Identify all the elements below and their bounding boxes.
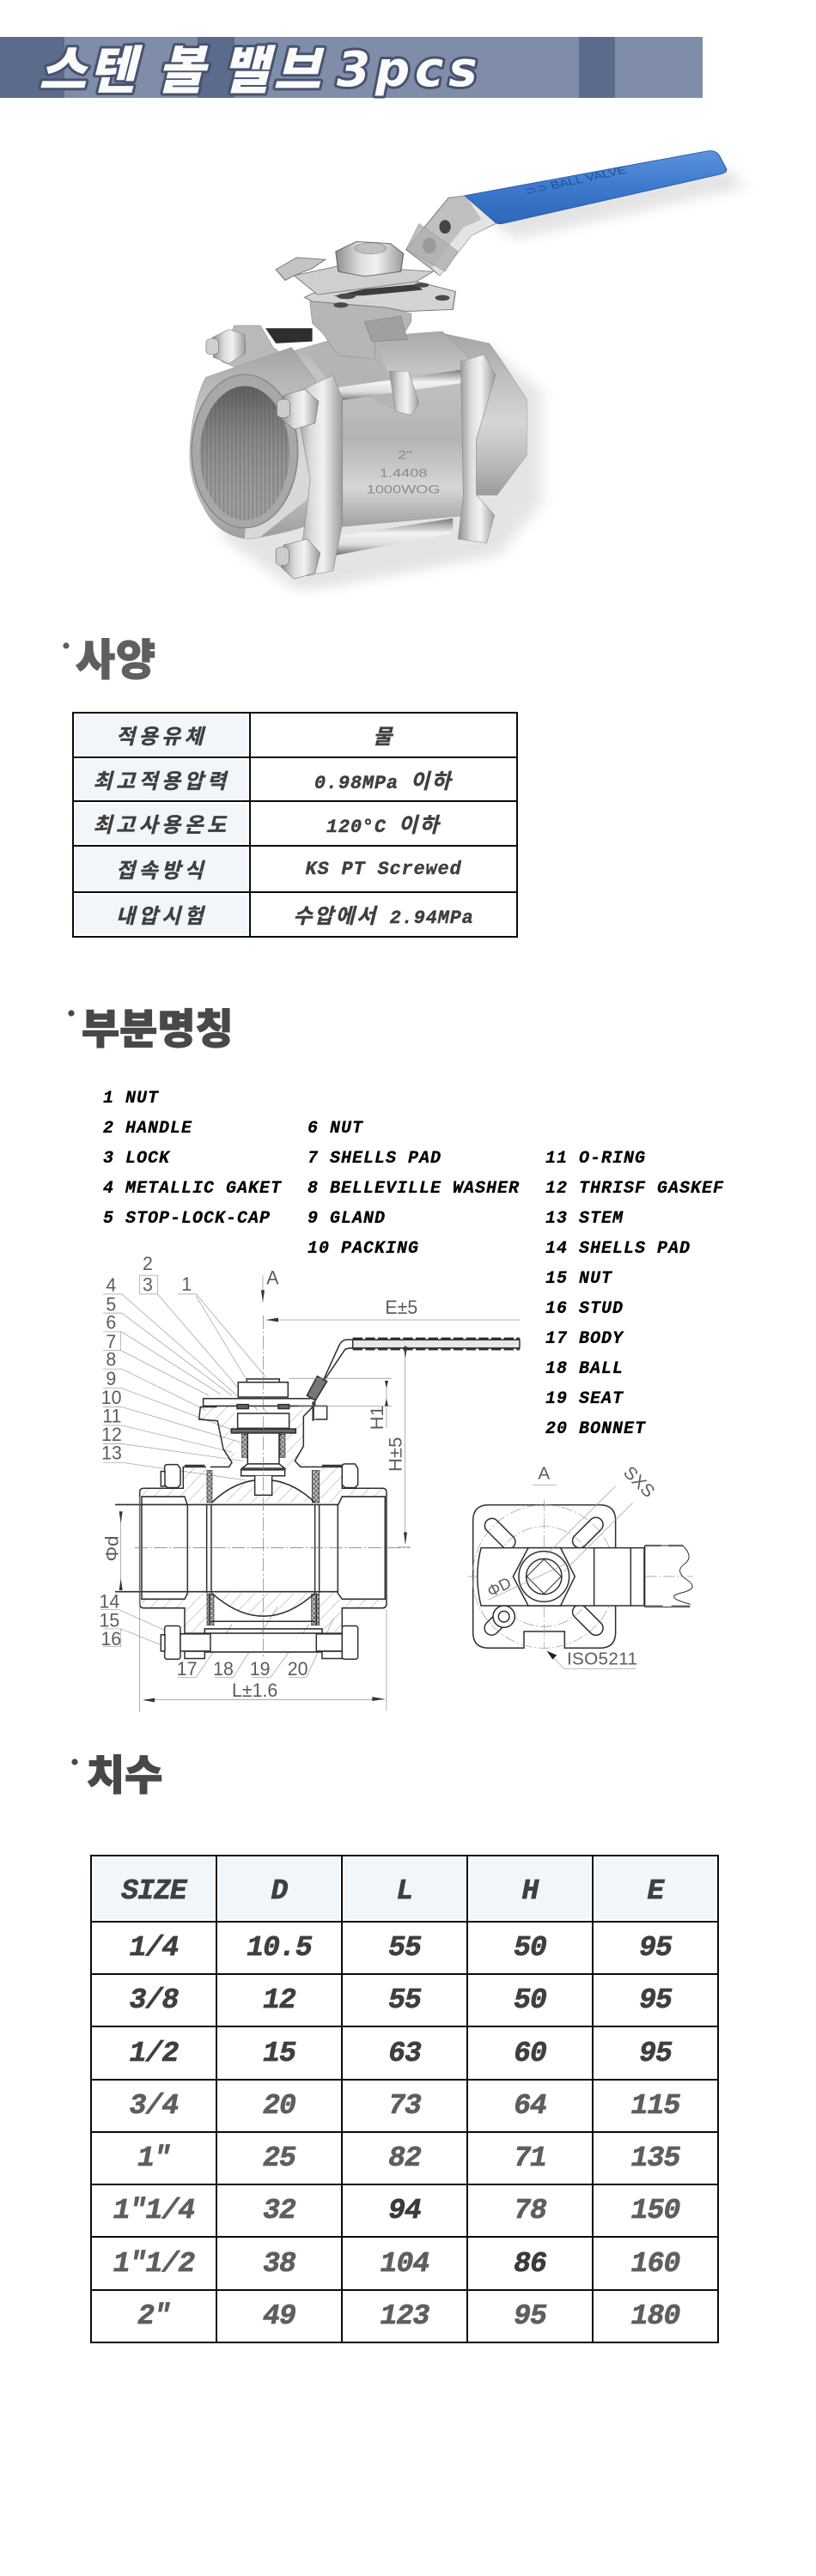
parts list: 7 SHELLS PAD [308, 1149, 441, 1169]
lock pin circles [493, 1606, 515, 1627]
dimensions table: 1"1/2 [113, 2248, 194, 2279]
dimensions table: 73 [388, 2090, 421, 2122]
dimensions table: 123 [381, 2300, 429, 2332]
parts list: 8 BELLEVILLE WASHER [308, 1179, 520, 1199]
parts list: 18 BALL [545, 1359, 624, 1379]
parts list: 17 BODY [545, 1329, 624, 1349]
drawing part numbers and dimension labels: 2 [143, 1253, 153, 1274]
dimensions table: 78 [514, 2195, 546, 2227]
dimensions table: 3/4 [130, 2090, 178, 2122]
dimensions table: 86 [514, 2248, 546, 2279]
dimensions table: E [648, 1875, 663, 1907]
spec table: 물 [373, 727, 394, 750]
top view labels: A [538, 1464, 550, 1484]
drawing part numbers and dimension labels: 12 [101, 1424, 122, 1445]
valve seats [207, 1434, 320, 1625]
spec table: 수압에서 2.94MPa [293, 907, 474, 930]
dimensions table: 150 [631, 2195, 679, 2227]
dimensions table [90, 1855, 719, 2343]
spec table: KS PT Screwed [305, 859, 462, 879]
drawing part numbers and dimension labels: 6 [106, 1311, 116, 1334]
parts list: 16 STUD [545, 1299, 624, 1319]
drawing part numbers and dimension labels: 7 [106, 1331, 116, 1352]
dimensions table: L [397, 1875, 412, 1907]
dimensions table: 1" [137, 2142, 170, 2174]
dimensions table: 82 [388, 2142, 421, 2174]
drawing part numbers and dimension labels: 1 [181, 1273, 192, 1295]
dimensions table: 71 [514, 2142, 546, 2174]
dimensions table: 25 [263, 2142, 295, 2174]
dimensions table: 2" [137, 2300, 170, 2332]
dimensions table: 95 [639, 1932, 672, 1964]
spec table: 120°C 이하 [326, 816, 441, 839]
dimensions table: 64 [514, 2090, 546, 2122]
body top shoulder [308, 333, 406, 416]
dimensions table: 95 [639, 2037, 672, 2069]
drawing part numbers and dimension labels: 15 [99, 1609, 119, 1631]
drawing part numbers and dimension labels: L±1.6 [232, 1680, 277, 1701]
drawing part numbers and dimension labels: 19 [250, 1658, 271, 1680]
section heading: 치수: 치수 [87, 1741, 162, 1801]
spec table: 최고사용온도 [94, 816, 229, 839]
parts list: 5 STOP-LOCK-CAP [103, 1209, 271, 1229]
spec table: 0.98MPa 이하 [314, 771, 453, 795]
blue handle grip [465, 151, 727, 224]
dimension leaders [488, 1485, 636, 1668]
dimensions table: 135 [631, 2142, 679, 2174]
title text: 3pcs [337, 42, 483, 98]
dimensions table: 160 [631, 2248, 679, 2279]
parts list: 11 O-RING [545, 1149, 646, 1169]
drawing part numbers and dimension labels: 9 [106, 1368, 116, 1389]
parts list: 4 METALLIC GAKET [103, 1179, 282, 1199]
dimensions table: 95 [514, 2300, 546, 2332]
drawing part numbers and dimension labels: 16 [100, 1628, 121, 1649]
title banner [0, 29, 703, 104]
drawing part numbers and dimension labels: 5 [106, 1293, 116, 1315]
parts list [103, 1089, 724, 1439]
top view labels [484, 1462, 659, 1668]
handle band [478, 1546, 692, 1607]
handle lever arm [406, 196, 500, 276]
drawing part numbers and dimension labels: 20 [288, 1658, 308, 1680]
bolt circles [468, 1500, 693, 1649]
drawing part numbers and dimension labels [99, 1253, 417, 1701]
body markings: 1000WOG [367, 483, 441, 496]
dimension arrowheads [119, 1290, 407, 1702]
parts list: 20 BONNET [545, 1419, 646, 1439]
dimensions table: H [522, 1875, 538, 1907]
spec table [72, 712, 518, 938]
dimensions table: 32 [263, 2195, 295, 2227]
dimensions table: 55 [388, 1932, 421, 1964]
arrowheads [547, 1651, 557, 1660]
valve drop shadow [219, 167, 745, 591]
dimensions table: 3/8 [130, 1984, 178, 2016]
parts list: 1 NUT [103, 1089, 159, 1109]
grip lettering: ⊃⊃ BALL VALVE [523, 163, 628, 197]
front left end cap and threaded port [190, 348, 315, 539]
parts list: 2 HANDLE [103, 1119, 192, 1139]
dimensions table: 50 [514, 1984, 546, 2016]
right flange [458, 355, 496, 543]
parts list: 15 NUT [545, 1269, 612, 1289]
handle arm and grip [307, 1339, 520, 1421]
drawing part numbers and dimension labels: 4 [106, 1274, 116, 1296]
dimensions table: 115 [631, 2090, 679, 2122]
sectional drawing of valve [99, 1253, 520, 1712]
dimensions table: 60 [514, 2037, 546, 2069]
parts list: 14 SHELLS PAD [545, 1239, 691, 1259]
drawing part numbers and dimension labels: H±5 [385, 1437, 406, 1472]
top view labels: SXS [619, 1462, 659, 1502]
rear left flange and nut [206, 325, 313, 374]
dimensions table: 12 [263, 1984, 295, 2016]
hex stem nut [336, 241, 404, 276]
mounting slots [482, 1515, 606, 1638]
rear right end cap [442, 333, 527, 495]
drawing part numbers and dimension labels: A [266, 1267, 279, 1289]
drawing part numbers and dimension labels: 17 [177, 1658, 198, 1680]
valve neck [310, 300, 411, 359]
mounting plate [276, 258, 455, 312]
spec table: 내압시험 [116, 907, 207, 930]
dimensions table: 1"1/4 [113, 2195, 194, 2227]
centre body cylinder [291, 331, 471, 527]
centre clamp [389, 371, 419, 416]
dimensions table: 180 [631, 2300, 679, 2332]
rear stud rod [333, 369, 465, 402]
dimensions table: 55 [388, 1984, 421, 2016]
product photo: stainless ball valve [190, 151, 745, 591]
front left flange [294, 375, 343, 576]
dimensions table: 1/4 [130, 1932, 178, 1964]
dimensions table: 38 [263, 2248, 295, 2279]
dimensions table: 94 [388, 2195, 421, 2227]
section heading: 사양: 사양 [76, 626, 156, 688]
stud nuts [276, 389, 320, 579]
parts list: 19 SEAT [545, 1389, 624, 1409]
title text: 스텐볼밸브 [39, 29, 325, 104]
centre lines [135, 1315, 410, 1657]
drawing part numbers and dimension labels: 11 [102, 1405, 121, 1427]
title text [39, 29, 483, 104]
stem hex nut [513, 1548, 575, 1606]
body markings: 1.4408 [380, 467, 427, 480]
section heading: 부분명칭: 부분명칭 [82, 995, 234, 1055]
top view labels: ISO5211 [567, 1649, 637, 1668]
parts list: 3 LOCK [103, 1149, 170, 1169]
parts list: 13 STEM [545, 1209, 624, 1229]
spec table: 적용유체 [116, 727, 207, 750]
dimensions table: D [271, 1875, 287, 1907]
dimensions table: 104 [381, 2248, 429, 2279]
parts list: 6 NUT [308, 1119, 363, 1139]
dimensions table: 10.5 [247, 1932, 312, 1964]
drawing part numbers and dimension labels: H1 [366, 1406, 387, 1430]
drawing part numbers and dimension labels: 13 [101, 1442, 122, 1464]
top view drawing with ISO5211 flange [468, 1462, 693, 1668]
parts list: 12 THRISF GASKEF [545, 1179, 724, 1199]
dimensions table: SIZE [121, 1875, 186, 1907]
top view labels: ΦD [484, 1573, 514, 1601]
dimensions table: 63 [388, 2037, 421, 2069]
drawing part numbers and dimension labels: 14 [99, 1590, 119, 1613]
parts list: 10 PACKING [308, 1239, 419, 1259]
spec table: 접속방식 [116, 861, 207, 884]
lower stud rod [333, 519, 453, 556]
leader lines [100, 1275, 333, 1677]
parts list: 9 GLAND [308, 1209, 386, 1229]
bolts and nuts [161, 1464, 358, 1659]
dimensions table: 1/2 [130, 2037, 178, 2069]
body outline [115, 1399, 387, 1633]
dimensions table: 95 [639, 1984, 672, 2016]
dimensions table: 20 [263, 2090, 295, 2122]
drawing part numbers and dimension labels: 18 [213, 1658, 234, 1680]
drawing part numbers and dimension labels: E±5 [385, 1297, 417, 1318]
body markings: 2" [398, 449, 412, 462]
dimensions table: 50 [514, 1932, 546, 1964]
drawing part numbers and dimension labels: Φd [101, 1536, 122, 1562]
dimensions table: 49 [263, 2300, 295, 2332]
dimension lines [121, 1275, 520, 1712]
dimensions table: 15 [263, 2037, 295, 2069]
spec table: 최고적용압력 [94, 771, 229, 795]
drawing part numbers and dimension labels: 8 [106, 1348, 116, 1370]
hatching [142, 1399, 387, 1631]
drawing part numbers and dimension labels: 10 [101, 1387, 122, 1408]
stem and ball top [204, 1379, 315, 1495]
drawing part numbers and dimension labels: 3 [143, 1273, 153, 1296]
body markings [367, 449, 441, 496]
flange plate [473, 1505, 616, 1648]
